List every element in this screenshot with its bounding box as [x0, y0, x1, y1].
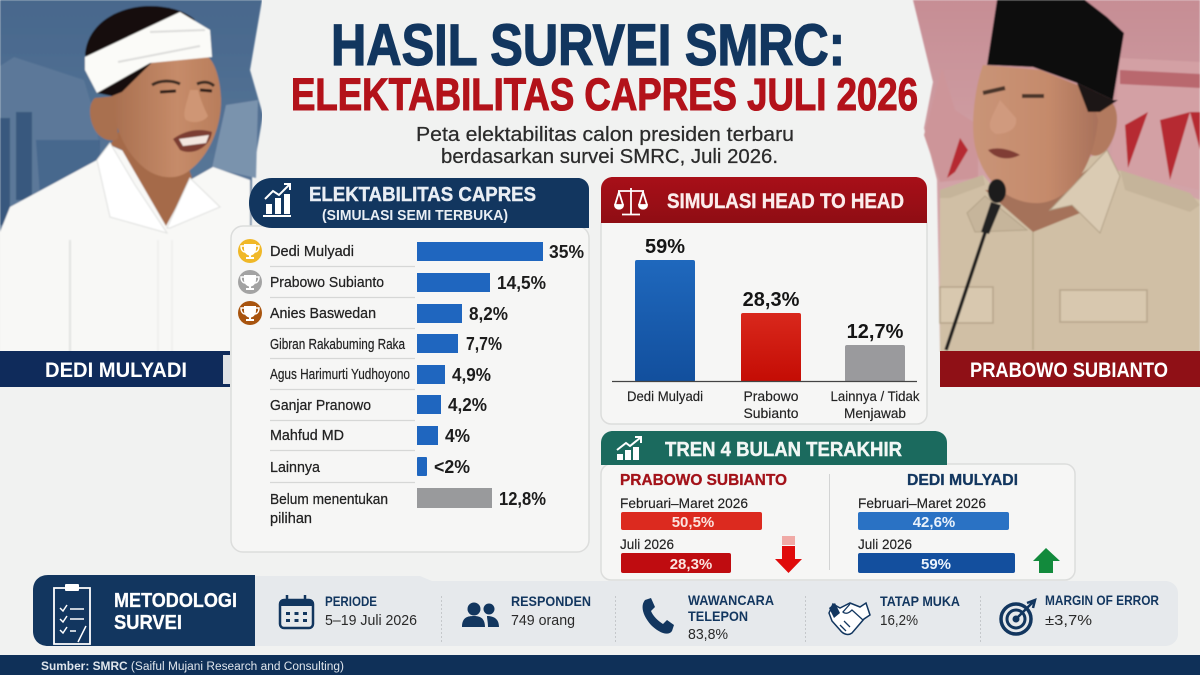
item: periode: 5–19 Juli 2026 — [325, 612, 417, 629]
bar: Dedi Mulyadi 59%: Dedi Mulyadi — [627, 388, 703, 404]
row: Mahfud MD: 4% — [445, 426, 470, 446]
photo: Dedi Mulyadi — [0, 0, 263, 352]
panel heading: (SIMULASI SEMI TERBUKA) — [322, 207, 508, 224]
row: Mahfud MD — [270, 426, 470, 446]
item: margin of error: MARGIN OF ERROR — [1045, 592, 1159, 608]
bar: Lainnya / Tidak Menjawab 12,7%: Lainnya / Tidak — [830, 388, 920, 404]
bar: Lainnya / Tidak Menjawab 12,7%: 12,7% — [847, 321, 904, 343]
row: Belum menentukan pilihan — [270, 488, 546, 527]
row dividers — [270, 266, 415, 482]
row: Gibran Rakabuming Raka: 7,7% — [466, 334, 502, 354]
subtitle: Peta elektabilitas calon presiden terbaru — [416, 124, 794, 146]
bar: Dedi Mulyadi 59% — [627, 236, 703, 404]
trend: Dedi Mulyadi — [858, 472, 1060, 573]
bar: Prabowo Subianto 28,3% — [741, 289, 801, 421]
name tag: Prabowo Subianto: PRABOWO SUBIANTO — [970, 359, 1168, 382]
row: Agus Harimurti Yudhoyono — [270, 365, 491, 385]
footer: source: Sumber: SMRC (Saiful Mujani Research and Consulting) — [41, 661, 344, 673]
panel heading — [249, 178, 589, 228]
item: wawancara telepon: WAWANCARA — [688, 592, 774, 608]
row: Lainnya: Lainnya — [270, 459, 321, 476]
row: Belum menentukan pilihan: 12,8% — [499, 489, 546, 509]
panel body — [601, 464, 1075, 580]
panel heading — [601, 177, 927, 223]
item: wawancara telepon: TELEPON — [688, 608, 748, 624]
item: tatap muka: TATAP MUKA — [880, 593, 960, 609]
bar: Prabowo Subianto 28,3%: 28,3% — [743, 289, 800, 311]
panel: tren 4 bulan terakhir — [601, 431, 1075, 580]
trend: Dedi Mulyadi: Februari–Maret 2026 — [858, 495, 986, 511]
row: Prabowo Subianto: 14,5% — [497, 273, 546, 293]
trend: Prabowo Subianto — [620, 472, 802, 573]
item: margin of error: ±3,7% — [1045, 612, 1092, 629]
subtitle: berdasarkan survei SMRC, Juli 2026. — [441, 146, 778, 168]
row: Belum menentukan pilihan: pilihan — [270, 510, 312, 527]
item: responden: RESPONDEN — [511, 593, 591, 609]
panel: simulasi head to head — [601, 177, 927, 424]
bar: Dedi Mulyadi 59%: 59% — [645, 236, 685, 258]
name tag: Dedi Mulyadi — [0, 351, 230, 387]
heading: metodologi survei: SURVEI — [114, 612, 182, 634]
bar: Prabowo Subianto 28,3%: Subianto — [744, 405, 799, 421]
row: Dedi Mulyadi — [238, 239, 584, 263]
panel body — [601, 215, 927, 424]
trend: Prabowo Subianto: PRABOWO SUBIANTO — [620, 472, 787, 489]
panel: elektabilitas capres — [231, 178, 589, 552]
icon: arrow down — [775, 536, 802, 573]
trend: Dedi Mulyadi: Juli 2026 — [858, 536, 912, 552]
trend: Prabowo Subianto: 50,5% — [672, 514, 714, 531]
row: Ganjar Pranowo: Ganjar Pranowo — [270, 397, 371, 414]
trend: Prabowo Subianto: Juli 2026 — [620, 536, 674, 552]
name tag: Dedi Mulyadi: DEDI MULYADI — [45, 359, 187, 382]
item: responden: 749 orang — [511, 612, 575, 629]
bar: Lainnya / Tidak Menjawab 12,7% — [830, 321, 920, 421]
footer: source — [0, 655, 1200, 675]
trend: Dedi Mulyadi: 59% — [921, 556, 951, 573]
trend: Prabowo Subianto: 28,3% — [670, 556, 712, 573]
item: tatap muka: 16,2% — [880, 612, 918, 629]
row: Dedi Mulyadi: 35% — [549, 242, 584, 262]
heading: metodologi survei: METODOLOGI — [114, 590, 237, 612]
panel heading: TREN 4 BULAN TERAKHIR — [665, 439, 903, 461]
panel body — [231, 226, 589, 552]
row: Prabowo Subianto — [238, 270, 546, 294]
name tag: Prabowo Subianto — [940, 351, 1200, 387]
row: Anies Baswedan: Anies Baswedan — [270, 305, 376, 322]
row: Lainnya — [270, 457, 470, 477]
item: periode — [280, 593, 417, 629]
title: ELEKTABILITAS CAPRES JULI 2026 — [291, 69, 918, 120]
panel heading — [601, 431, 947, 465]
icon: arrow up — [1033, 548, 1060, 573]
row: Belum menentukan pilihan: Belum menentukan — [270, 491, 388, 508]
title — [291, 13, 918, 120]
heading: metodologi survei — [33, 575, 255, 646]
row: Anies Baswedan: 8,2% — [469, 304, 508, 324]
item: periode: PERIODE — [325, 593, 377, 609]
panel heading: ELEKTABILITAS CAPRES — [309, 184, 536, 206]
subtitle — [416, 124, 794, 168]
trend: Dedi Mulyadi: DEDI MULYADI — [907, 472, 1018, 489]
row: Prabowo Subianto: Prabowo Subianto — [270, 274, 384, 291]
trend: Dedi Mulyadi: 42,6% — [913, 514, 955, 531]
row: Anies Baswedan — [238, 301, 508, 325]
row: Ganjar Pranowo: 4,2% — [448, 395, 487, 415]
photo: Prabowo Subianto — [913, 0, 1200, 352]
item: margin of error — [1001, 592, 1159, 634]
row: Agus Harimurti Yudhoyono: Agus Harimurti Yudhoyono — [270, 366, 410, 383]
icon: scales — [615, 188, 647, 214]
row: Gibran Rakabuming Raka — [270, 334, 502, 354]
item: responden — [462, 593, 591, 629]
item: tatap muka — [829, 593, 960, 634]
item: wawancara telepon: 83,8% — [688, 626, 728, 643]
item: wawancara telepon — [643, 592, 774, 643]
row: Gibran Rakabuming Raka: Gibran Rakabuming Raka — [270, 336, 406, 353]
panel heading: SIMULASI HEAD TO HEAD — [667, 190, 904, 213]
row: Ganjar Pranowo — [270, 395, 487, 415]
trend: Prabowo Subianto: Februari–Maret 2026 — [620, 495, 748, 511]
bar: Prabowo Subianto 28,3%: Prabowo — [744, 388, 799, 404]
panel: metodologi survei — [33, 575, 1178, 646]
row: Dedi Mulyadi: Dedi Mulyadi — [270, 243, 354, 260]
row: Lainnya: <2% — [434, 457, 470, 477]
bar: Lainnya / Tidak Menjawab 12,7%: Menjawab — [844, 405, 906, 421]
row: Mahfud MD: Mahfud MD — [270, 427, 344, 444]
title: HASIL SURVEI SMRC: — [331, 13, 845, 78]
row: Agus Harimurti Yudhoyono: 4,9% — [452, 365, 491, 385]
